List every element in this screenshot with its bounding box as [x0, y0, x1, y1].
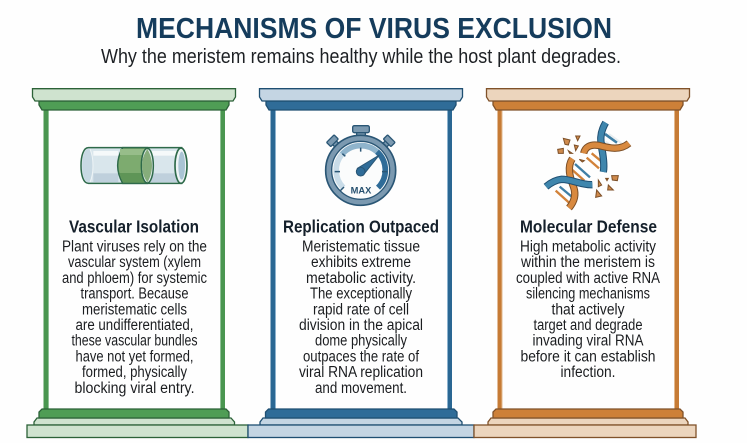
base	[27, 409, 248, 438]
heading: Molecular Defense	[520, 216, 657, 236]
icon: vascular tube	[81, 148, 187, 183]
heading: Replication Outpaced	[283, 216, 439, 236]
panel: vascular isolation	[27, 89, 248, 437]
body text	[516, 238, 661, 381]
body text: target and degrade	[534, 317, 642, 334]
body text: meristematic cells	[82, 301, 187, 318]
body text: outpaces the rate of	[303, 348, 420, 365]
base	[474, 409, 696, 438]
body text: rapid rate of cell	[313, 301, 409, 318]
body text: vascular system (xylem	[68, 254, 201, 271]
body text: viral RNA replication	[299, 364, 423, 381]
body text	[299, 238, 423, 397]
icon: stopwatch: MAX	[351, 186, 372, 196]
title: MECHANISMS OF VIRUS EXCLUSION	[136, 13, 612, 45]
icon: broken DNA helix	[546, 123, 629, 208]
top capital	[260, 89, 462, 110]
fragments	[558, 136, 618, 197]
body text: High metabolic activity	[520, 238, 656, 256]
rungs	[556, 134, 622, 203]
body text: The exceptionally	[310, 286, 412, 303]
body text: Plant viruses rely on the	[62, 238, 207, 256]
column frame	[270, 110, 452, 409]
body text: coupled with active RNA	[516, 270, 661, 287]
panel: replication outpaced	[248, 89, 474, 437]
body text: and phloem) for systemic	[62, 270, 207, 287]
body text	[62, 238, 207, 397]
body text: invading viral RNA	[532, 333, 644, 350]
body text: before it can establish	[520, 348, 656, 365]
body text: metabolic activity.	[306, 270, 416, 287]
heading: Vascular Isolation	[69, 216, 199, 236]
body text: formed, physically	[82, 364, 187, 381]
body text: infection.	[560, 364, 616, 381]
body text: and movement.	[315, 380, 407, 397]
strands	[546, 123, 629, 208]
body text: these vascular bundles	[72, 333, 198, 350]
base	[248, 409, 474, 438]
panel: molecular defense	[474, 89, 696, 437]
body text: silencing mechanisms	[526, 286, 650, 303]
body text: that actively	[552, 301, 625, 318]
body text: division in the apical	[299, 317, 423, 334]
body text: exhibits extreme	[311, 254, 411, 271]
top capital	[486, 89, 690, 110]
body text: have not yet formed,	[76, 348, 194, 365]
column frame	[44, 110, 225, 409]
body text: dome physically	[315, 333, 407, 350]
body text: within the meristem is	[520, 254, 655, 271]
icon: stopwatch	[326, 126, 396, 205]
column frame	[498, 110, 679, 409]
body text: blocking viral entry.	[74, 380, 194, 397]
top capital	[32, 89, 236, 110]
subtitle: Why the meristem remains healthy while the host plant degrades.	[101, 46, 621, 68]
body text: Meristematic tissue	[302, 238, 420, 256]
body text: transport. Because	[80, 286, 188, 303]
body text: are undifferentiated,	[76, 317, 194, 334]
